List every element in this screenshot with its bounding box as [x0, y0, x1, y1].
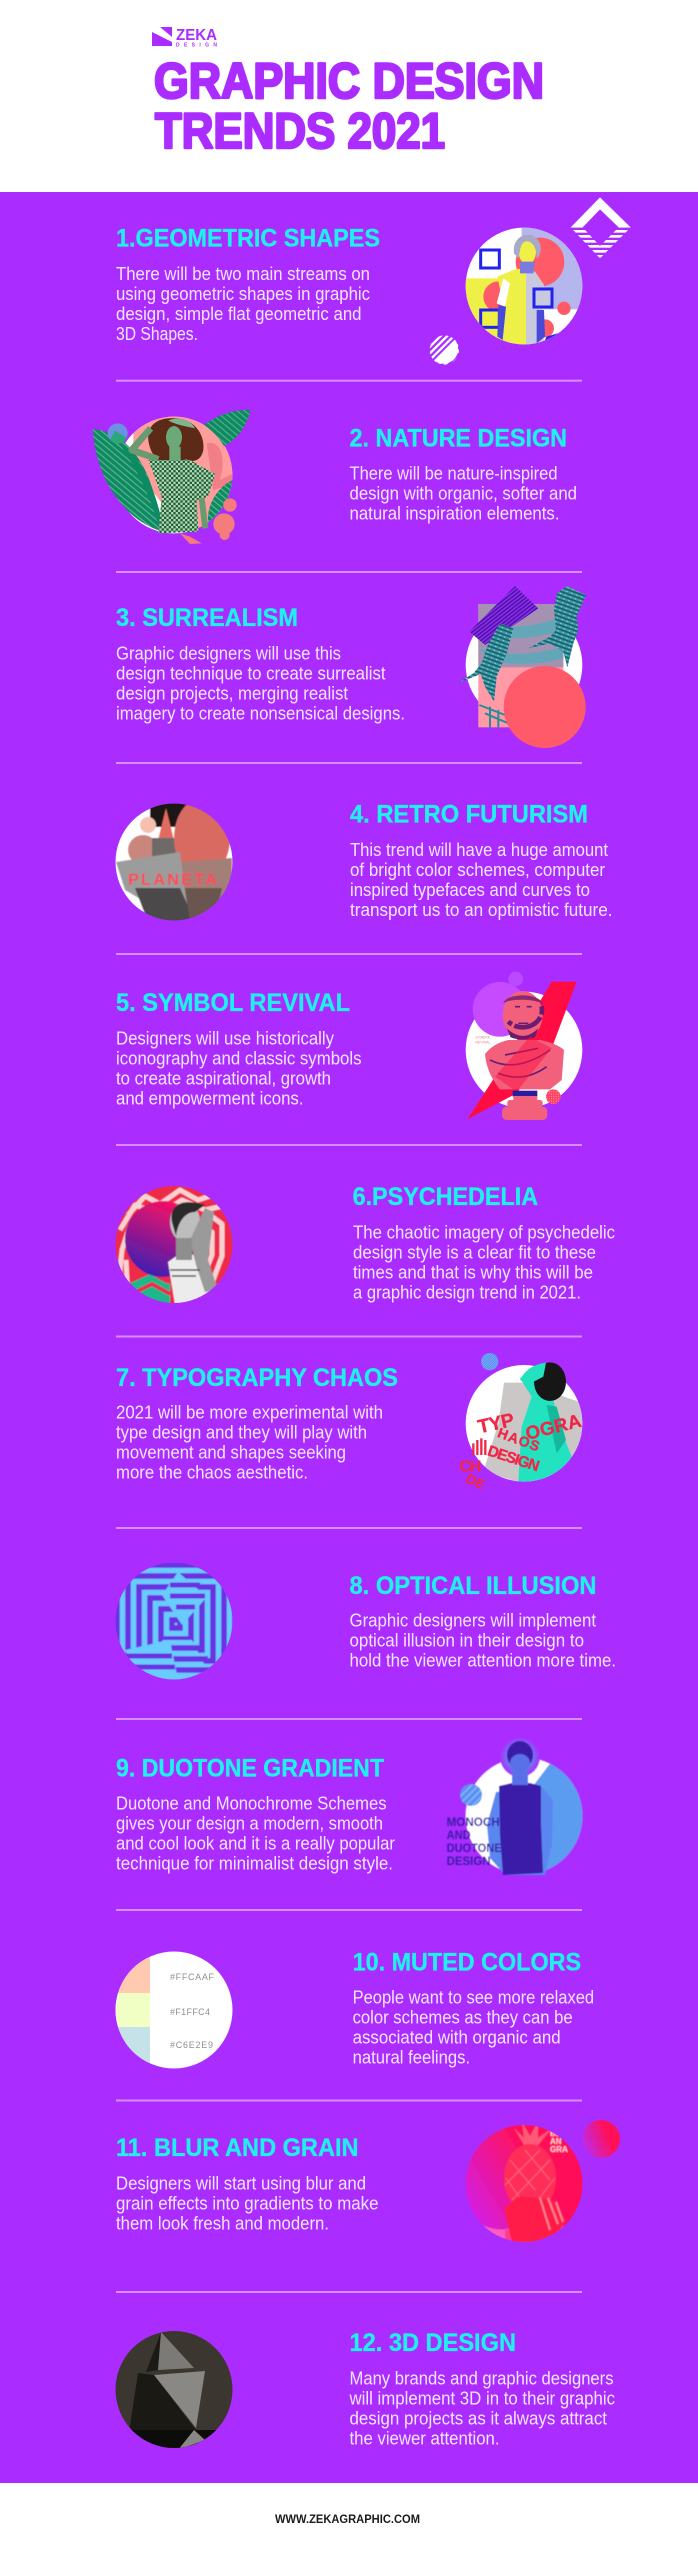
illustration: colour palette: #FFCAAF [170, 1972, 214, 1982]
text block 9 [116, 1792, 395, 1873]
heading 8: 8. OPTICAL ILLUSION [350, 1572, 596, 1600]
title: TRENDS 2021 [155, 103, 445, 159]
text block 9: gives your design a modern, smooth [116, 1812, 383, 1833]
illustration: woman and leaves [93, 410, 251, 544]
text block 12: the viewer attention. [350, 2428, 500, 2449]
text block 2: There will be nature-inspired [350, 462, 558, 484]
illustration: concentric squares [115, 1562, 235, 1685]
illustration: typography collage: CH [459, 1459, 481, 1476]
text block 1: using geometric shapes in graphic [116, 283, 370, 304]
text block 6 [353, 1222, 615, 1303]
text block 4: This trend will have a huge amount [350, 839, 608, 860]
illustration: bust and lightning bolt: REVIVAL [475, 1040, 491, 1044]
section 8: optical illusion [115, 1562, 616, 1685]
illustration: flying cats [456, 586, 586, 748]
text block 1: There will be two main streams on [116, 263, 370, 284]
illustration: typography collage: TYP [476, 1410, 516, 1438]
illustration: duotone man: MONOCHROME [447, 1815, 535, 1829]
text block 1: 3D Shapes. [116, 323, 198, 344]
text block 9: Duotone and Monochrome Schemes [116, 1792, 386, 1813]
icon: striped circle [430, 335, 459, 365]
text block 8: optical illusion in their design to [350, 1630, 584, 1651]
text block 10: associated with organic and [353, 2026, 561, 2047]
illustration: duotone man: DUOTONE [447, 1841, 502, 1855]
illustration: colour palette [115, 1951, 233, 2069]
heading 10: 10. MUTED COLORS [353, 1949, 581, 1977]
text block 6: a graphic design trend in 2021. [353, 1282, 581, 1303]
heading 2: 2. NATURE DESIGN [350, 424, 567, 452]
text block 11: grain effects into gradients to make [116, 2192, 378, 2213]
illustration: 3D polygons [115, 2331, 233, 2450]
text block 10: People want to see more relaxed [353, 1986, 594, 2007]
text block 9: technique for minimalist design style. [116, 1852, 393, 1873]
section 4: retro futurism [115, 798, 612, 925]
heading 11: 11. BLUR AND GRAIN [116, 2134, 358, 2162]
text block 11: them look fresh and modern. [116, 2212, 329, 2233]
text block 7: more the chaos aesthetic. [116, 1462, 308, 1483]
heading 12: 12. 3D DESIGN [350, 2329, 516, 2357]
section 12: 3D design [115, 2329, 615, 2450]
illustration: retro collage: PLANETA [128, 871, 217, 889]
illustration: duotone man [447, 1737, 585, 1877]
icon: white diamond [571, 197, 631, 258]
text block 5: to create aspirational, growth [116, 1068, 331, 1089]
heading 9: 9. DUOTONE GRADIENT [116, 1755, 384, 1783]
text block 5: and empowerment icons. [116, 1088, 304, 1109]
section 3: surrealism [116, 586, 586, 748]
logo: Zeka Design [152, 27, 217, 48]
illustration: gradient pineapple: BL [550, 2129, 561, 2138]
illustration: bust and lightning bolt [466, 972, 582, 1120]
text block 3: Graphic designers will use this [116, 642, 341, 663]
illustration: gradient pineapple [465, 2122, 585, 2245]
text block 7: type design and they will play with [116, 1422, 367, 1443]
text block 4 [350, 839, 612, 920]
text block 6: The chaotic imagery of psychedelic [353, 1222, 615, 1243]
logo: Zeka Design: DESIGN [176, 42, 217, 48]
illustration: typography collage: HAOS [496, 1424, 542, 1454]
text block 5: Designers will use historically [116, 1028, 335, 1049]
text block 2: design with organic, softer and [350, 482, 577, 504]
text block 12: Many brands and graphic designers [350, 2368, 614, 2389]
text block 3: design technique to create surrealist [116, 662, 386, 683]
section 5: symbol revival [116, 972, 582, 1120]
text block 11: Designers will start using blur and [116, 2172, 366, 2193]
header [152, 27, 544, 159]
heading 3: 3. SURREALISM [116, 604, 298, 632]
section 9: duotone gradient [116, 1737, 585, 1877]
text block 2: natural inspiration elements. [350, 502, 560, 524]
swatch: #C6E2E9 [118, 2027, 150, 2064]
text block 11 [116, 2172, 378, 2233]
text block 5: iconography and classic symbols [116, 1048, 362, 1069]
text block 3: imagery to create nonsensical designs. [116, 702, 405, 723]
text block 8: Graphic designers will implement [350, 1610, 596, 1631]
swatch: #F1FFC4 [115, 1993, 150, 2027]
text block 12 [349, 2368, 615, 2449]
heading 4: 4. RETRO FUTURISM [350, 801, 588, 829]
text block 3 [116, 642, 405, 723]
illustration: geometric collage [466, 228, 582, 344]
section 7: typography chaos [116, 1353, 583, 1492]
text block 4: inspired typefaces and curves to [350, 879, 590, 900]
icon: gradient circle [582, 2120, 620, 2158]
text block 1 [116, 263, 370, 344]
illustration: gradient pineapple: AN [550, 2137, 562, 2146]
illustration: retro collage [115, 798, 233, 925]
text block 10 [353, 1986, 594, 2067]
illustration: typography collage [459, 1353, 583, 1492]
text block 1: design, simple flat geometric and [116, 303, 362, 324]
illustration: gradient pineapple: GRA [550, 2145, 568, 2154]
text block 5 [116, 1028, 362, 1109]
heading 6: 6.PSYCHEDELIA [353, 1183, 538, 1211]
illustration: colour palette: #F1FFC4 [170, 2007, 210, 2017]
footer url: WWW.ZEKAGRAPHIC.COM [275, 2514, 420, 2526]
text block 6: design style is a clear fit to these [353, 1242, 596, 1263]
title [154, 53, 544, 159]
text block 8 [350, 1610, 616, 1671]
text block 4: transport us to an optimistic future. [350, 899, 612, 920]
illustration: psychedelic portrait [115, 1185, 233, 1310]
illustration: bust and lightning bolt: SYMBOL [475, 1036, 491, 1040]
section 10: muted colors [115, 1949, 594, 2069]
title: GRAPHIC DESIGN [154, 53, 544, 109]
text block 6: times and that is why this will be [353, 1262, 593, 1283]
section 6: psychedelia [115, 1183, 615, 1310]
illustration: typography collage: DE [464, 1471, 487, 1492]
heading 5: 5. SYMBOL REVIVAL [116, 989, 350, 1017]
text block 8: hold the viewer attention more time. [350, 1650, 616, 1671]
section 11: blur and grain [116, 2120, 620, 2245]
logo: Zeka Design: ZEKA [176, 27, 217, 44]
illustration: typography collage: OGRA [523, 1410, 583, 1444]
swatch: #FFCAAF [118, 1956, 150, 1993]
text block 10: natural feelings. [353, 2046, 470, 2067]
illustration: typography collage: DESIGN [485, 1443, 541, 1475]
text block 4: of bright color schemes, computer [350, 859, 605, 880]
text block 12: design projects as it always attract [350, 2408, 607, 2429]
text block 10: color schemes as they can be [353, 2006, 573, 2027]
text block 3: design projects, merging realist [116, 682, 348, 703]
text block 7: movement and shapes seeking [116, 1442, 346, 1463]
section 1: geometric shapes [116, 197, 631, 365]
heading 1: 1.GEOMETRIC SHAPES [116, 224, 380, 252]
text block 9: and cool look and it is a really popular [116, 1832, 395, 1853]
illustration: duotone man: AND [447, 1828, 471, 1842]
text block 12: will implement 3D in to their graphic [349, 2388, 615, 2409]
illustration: colour palette: #C6E2E9 [170, 2040, 213, 2050]
text block 7 [116, 1402, 383, 1483]
illustration: duotone man: DESIGN [447, 1854, 491, 1868]
heading 7: 7. TYPOGRAPHY CHAOS [116, 1364, 398, 1392]
text block 7: 2021 will be more experimental with [116, 1402, 383, 1423]
text block 2 [350, 462, 577, 524]
section 2: nature design [93, 410, 577, 544]
